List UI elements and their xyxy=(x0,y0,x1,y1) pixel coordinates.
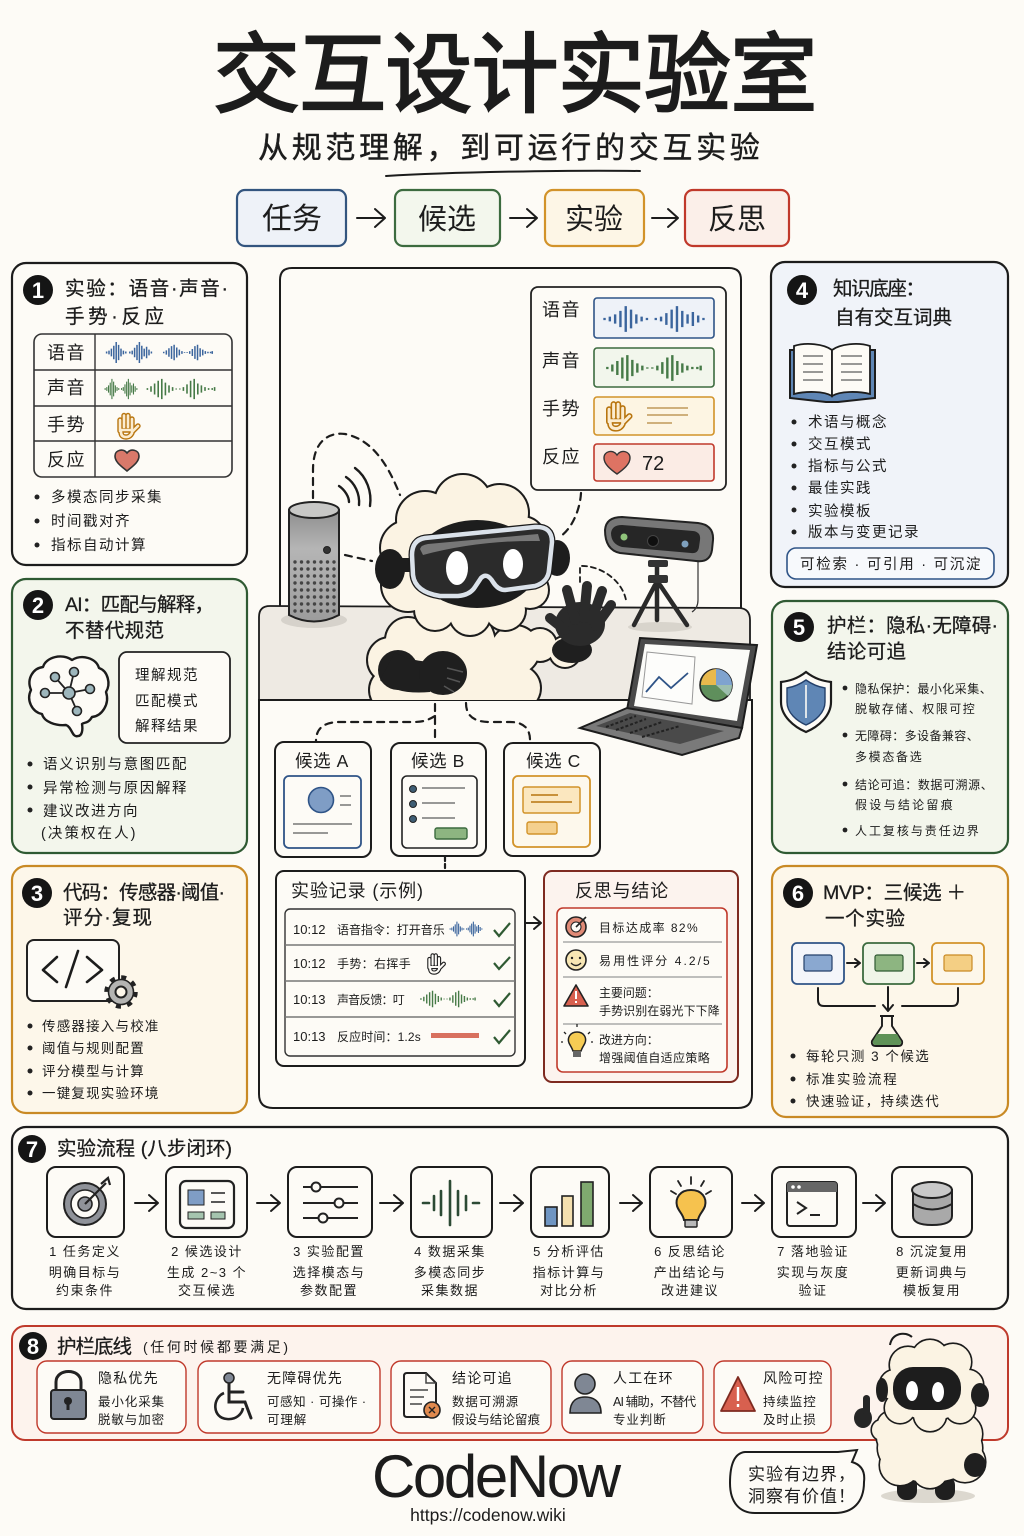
card: privacy xyxy=(37,1361,186,1433)
camera on tripod xyxy=(605,517,713,632)
card: risk control xyxy=(714,1361,831,1433)
heading: AI：匹配与解释， xyxy=(65,594,214,616)
speech bubble xyxy=(730,1450,864,1513)
step 6 xyxy=(650,1167,732,1298)
number badge 1: 1 xyxy=(32,278,44,303)
lower lab section xyxy=(259,700,752,1108)
speech bubble: 实验有边界， xyxy=(748,1465,856,1484)
pill: 候选 xyxy=(395,190,500,246)
number badge 2: 2 xyxy=(32,593,44,618)
candidate C xyxy=(504,743,600,856)
heading xyxy=(65,594,214,642)
waving gloved hand xyxy=(550,586,611,663)
thumbs-up hand xyxy=(854,1395,872,1428)
right hand xyxy=(964,1453,986,1477)
step 6: 改进建议 xyxy=(661,1283,719,1298)
step 1 xyxy=(47,1167,124,1298)
heading xyxy=(57,1336,288,1358)
bullets: 每轮只测 3 个候选 xyxy=(806,1049,930,1064)
card: traceability: 数据可溯源 xyxy=(452,1394,519,1409)
step 2: 交互候选 xyxy=(178,1283,236,1298)
card: privacy: 脱敏与加密 xyxy=(98,1412,165,1427)
bullets: 一键复现实验环境 xyxy=(42,1085,160,1101)
number badge 8 xyxy=(19,1332,47,1360)
card: privacy: 最小化采集 xyxy=(98,1394,165,1409)
bullets: 多模态备选 xyxy=(855,750,922,764)
log row 3: 声音反馈：叮 xyxy=(337,992,405,1007)
bullets: 实验模板 xyxy=(808,502,872,520)
card: risk control: 持续监控 xyxy=(763,1394,817,1409)
step 5: 对比分析 xyxy=(540,1283,598,1298)
camera cable xyxy=(692,562,698,612)
step 4: 多模态同步 xyxy=(414,1265,486,1280)
step 1: 约束条件 xyxy=(56,1283,114,1298)
sheep head xyxy=(381,475,548,635)
heading: 实验：语音·声音· xyxy=(65,278,228,300)
candidate C: 候选 C xyxy=(526,751,581,771)
step 3: 参数配置 xyxy=(300,1283,358,1298)
icon: shield xyxy=(781,672,831,732)
bullets xyxy=(790,1049,940,1109)
heading: 实验流程 (八步闭环) xyxy=(57,1138,232,1160)
sheep body xyxy=(366,616,579,700)
candidate A: 候选 A xyxy=(295,751,349,771)
pill: 候选: 候选 xyxy=(418,203,476,236)
bullets xyxy=(28,755,188,842)
card: risk control: 风险可控 xyxy=(763,1370,824,1386)
panel 1: experiment xyxy=(12,263,247,565)
sheep mascot with headset xyxy=(368,475,611,730)
logo: CodeNow xyxy=(372,1443,622,1510)
panel 6: MVP xyxy=(772,866,1008,1117)
dashed link to readout xyxy=(561,493,581,536)
arrow xyxy=(380,1195,403,1211)
step 7: 7 落地验证 xyxy=(777,1244,849,1259)
ears xyxy=(375,540,570,589)
step 3 xyxy=(288,1167,372,1298)
log row 3 xyxy=(293,991,510,1007)
heading: 评分·复现 xyxy=(63,907,152,929)
bullets: 隐私保护：最小化采集、 xyxy=(855,681,992,696)
card: human in the loop: AI 辅助，不替代 xyxy=(613,1395,697,1409)
bullets: 标准实验流程 xyxy=(806,1072,898,1087)
experiment log: 实验记录 (示例) xyxy=(291,881,423,901)
number badge 6 xyxy=(783,878,813,908)
icon: heart xyxy=(115,450,139,471)
pill: 反思 xyxy=(685,190,789,246)
heading: 结论可追 xyxy=(827,641,906,663)
step 8 xyxy=(892,1167,972,1298)
arrow log to reflection xyxy=(525,917,541,929)
log row 2: 10:12 xyxy=(293,956,326,971)
number badge 5 xyxy=(784,612,814,642)
card: privacy: 隐私优先 xyxy=(98,1370,159,1386)
card: human in the loop xyxy=(562,1361,703,1433)
AI capabilities box: 理解规范 xyxy=(135,667,199,684)
heading: 不替代规范 xyxy=(65,620,164,642)
sensor readout panel: 手势 xyxy=(542,399,581,419)
card: traceability: 结论可追 xyxy=(452,1370,513,1386)
pill: 实验 xyxy=(545,190,644,246)
tag pill: 可检索 · 可引用 · 可沉淀 xyxy=(800,556,982,573)
pill: 任务 xyxy=(237,190,346,246)
icon: bulb xyxy=(561,1024,593,1057)
heading: 自有交互词典 xyxy=(835,307,952,329)
AI capabilities box: 匹配模式 xyxy=(135,693,199,710)
log row 1: 语音指令：打开音乐 xyxy=(337,922,445,937)
card: accessibility: 可感知 · 可操作 · xyxy=(267,1394,367,1409)
eyes xyxy=(906,1381,944,1402)
dashed links xyxy=(313,434,400,498)
pill: 任务: 任务 xyxy=(262,203,322,236)
step 5: 5 分析评估 xyxy=(533,1244,605,1259)
bullets: 交互模式 xyxy=(808,435,872,453)
voice readout xyxy=(594,298,714,338)
modality table: 反应 xyxy=(47,450,86,470)
icon: open book xyxy=(790,344,875,402)
small sheep giving thumbs up xyxy=(854,1334,989,1503)
fist finger creases xyxy=(444,668,463,692)
arrow xyxy=(357,209,385,227)
heading xyxy=(65,278,228,328)
bullets xyxy=(792,413,920,541)
log row 2: 手势：右挥手 xyxy=(337,956,411,971)
reflection and conclusion: 手势识别在弱光下下降 xyxy=(599,1004,720,1018)
step 5: 指标计算与 xyxy=(533,1265,605,1280)
subtitle underline xyxy=(386,171,640,176)
gesture readout xyxy=(594,397,714,435)
modality table: 语音 xyxy=(47,343,86,363)
step 7 xyxy=(772,1167,856,1298)
reflection and conclusion xyxy=(544,871,738,1082)
icon: document xyxy=(404,1373,440,1418)
log row 4: 反应时间：1.2s xyxy=(337,1029,421,1044)
bullets: 快速验证，持续迭代 xyxy=(806,1094,940,1109)
panel 7: experiment flow xyxy=(12,1127,1008,1309)
card: traceability: 假设与结论留痕 xyxy=(452,1412,541,1427)
heading: 手势·反应 xyxy=(65,306,164,328)
step 4 xyxy=(411,1167,492,1298)
bullets: 评分模型与计算 xyxy=(42,1064,145,1079)
modality table xyxy=(34,334,232,477)
panel 4: knowledge base xyxy=(771,262,1008,587)
laptop with charts xyxy=(580,638,757,755)
reaction readout xyxy=(594,444,714,481)
step 4: 4 数据采集 xyxy=(414,1244,486,1259)
number badge 7 xyxy=(18,1135,46,1163)
arrow xyxy=(257,1195,280,1211)
icon: warning xyxy=(564,985,588,1006)
bullets: (决策权在人) xyxy=(41,825,137,842)
panel 2: AI xyxy=(12,579,247,853)
step 2 xyxy=(166,1167,247,1298)
eyes xyxy=(446,549,523,585)
headset goggles xyxy=(412,527,552,596)
dashed link camera to hand xyxy=(580,566,626,600)
reflection and conclusion: 主要问题： xyxy=(599,986,659,1000)
arrow xyxy=(652,209,678,227)
step 1: 1 任务定义 xyxy=(49,1244,121,1259)
bullets xyxy=(34,489,163,554)
sensor readout panel xyxy=(531,287,726,490)
dashed link speaker to sheep xyxy=(345,555,372,561)
heading xyxy=(823,882,966,930)
bullets: 传感器接入与校准 xyxy=(42,1018,160,1034)
bullets xyxy=(843,681,993,838)
heading: 护栏底线 xyxy=(57,1336,132,1358)
bullets xyxy=(28,1018,160,1101)
bullets: 异常检测与原因解释 xyxy=(43,780,188,797)
log row 3: 10:13 xyxy=(293,992,326,1007)
room backdrop xyxy=(280,268,741,610)
step 1: 明确目标与 xyxy=(49,1265,121,1280)
arrow xyxy=(510,209,537,227)
step 7: 实现与灰度 xyxy=(777,1265,849,1280)
dashed branch to candidates xyxy=(316,703,530,742)
bullets: 指标自动计算 xyxy=(51,537,147,554)
sensor readout panel: 语音 xyxy=(542,300,581,320)
heading: 代码：传感器·阈值· xyxy=(63,882,225,904)
url: https://codenow.wiki xyxy=(410,1505,566,1525)
bullets: 版本与变更记录 xyxy=(808,524,920,541)
arrow xyxy=(135,1195,158,1211)
heading: MVP：三候选 ＋ xyxy=(823,882,966,904)
step 4: 采集数据 xyxy=(421,1283,479,1298)
number badge 6: 6 xyxy=(792,881,804,906)
bullets: 多模态同步采集 xyxy=(51,489,163,506)
reflection and conclusion: 增强阈值自适应策略 xyxy=(599,1050,710,1065)
icon: hand xyxy=(120,416,138,437)
reflection and conclusion: 反思与结论 xyxy=(575,881,669,901)
step 8: 8 沉淀复用 xyxy=(896,1244,968,1259)
heading: 知识底座： xyxy=(833,278,925,300)
reaction readout: 72 xyxy=(642,453,664,475)
bullets: 假设与结论留痕 xyxy=(855,797,953,812)
icon: warning triangle xyxy=(721,1377,755,1411)
AI capabilities box: 解释结果 xyxy=(135,718,199,735)
pill: 反思: 反思 xyxy=(708,203,766,236)
heading: 一个实验 xyxy=(825,908,905,930)
reflection and conclusion: 易用性评分 4.2/5 xyxy=(599,954,710,968)
bullets: 结论可追：数据可溯源、 xyxy=(855,777,993,792)
bullets: 语义识别与意图匹配 xyxy=(43,755,188,773)
pill: 实验: 实验 xyxy=(565,203,623,236)
heading: (任何时候都要满足) xyxy=(143,1339,288,1355)
card: accessibility xyxy=(198,1361,380,1433)
arrow xyxy=(742,1195,764,1211)
wool body xyxy=(872,1412,985,1488)
card: traceability xyxy=(391,1361,551,1433)
smart speaker xyxy=(281,502,347,628)
step 7: 验证 xyxy=(798,1283,828,1298)
number badge 4: 4 xyxy=(796,278,809,303)
step 3: 3 实验配置 xyxy=(293,1244,365,1259)
bullets: 指标与公式 xyxy=(808,458,888,475)
right ear xyxy=(971,1383,989,1407)
arrow xyxy=(863,1195,885,1211)
wool head xyxy=(880,1340,983,1431)
log row 4: 10:13 xyxy=(293,1029,326,1044)
icon: code window and gear xyxy=(27,940,136,1006)
number badge 2 xyxy=(23,590,53,620)
flow diagram xyxy=(792,943,984,1046)
modality table: 手势 xyxy=(47,415,86,435)
reflection and conclusion: 目标达成率 82% xyxy=(599,920,698,935)
number badge 7: 7 xyxy=(26,1137,38,1162)
card: human in the loop: 专业判断 xyxy=(613,1412,667,1427)
sensor readout panel: 声音 xyxy=(542,351,581,371)
icon: wheelchair xyxy=(215,1373,251,1419)
dashed link to record xyxy=(444,857,446,871)
ground shadow xyxy=(881,1489,975,1503)
heading xyxy=(63,882,225,929)
bullets: 脱敏存储、权限可控 xyxy=(855,701,975,716)
arrow xyxy=(620,1195,642,1211)
reflection and conclusion: 改进方向： xyxy=(599,1032,659,1047)
curl xyxy=(890,1334,912,1345)
icon: brain network xyxy=(29,656,108,736)
experiment log xyxy=(276,871,525,1066)
bullets: 建议改进方向 xyxy=(43,803,139,820)
card: human in the loop: 人工在环 xyxy=(613,1370,674,1386)
card: accessibility: 可理解 xyxy=(267,1413,307,1427)
step 8: 更新词典与 xyxy=(896,1265,968,1280)
card: risk control: 及时止损 xyxy=(763,1413,817,1427)
sensor readout panel: 反应 xyxy=(542,447,581,467)
icon: person xyxy=(570,1374,601,1413)
step 6: 产出结论与 xyxy=(654,1265,726,1280)
step 2: 2 候选设计 xyxy=(171,1244,243,1259)
face xyxy=(893,1367,961,1410)
arrow xyxy=(500,1195,523,1211)
panel 8: guardrail baseline xyxy=(12,1326,1008,1440)
number badge 1 xyxy=(23,275,53,305)
tag pill xyxy=(787,548,994,579)
crossed arm xyxy=(378,650,467,695)
number badge 3 xyxy=(22,878,52,908)
number badge 3: 3 xyxy=(31,881,43,906)
central lab scene xyxy=(259,268,757,1108)
heading xyxy=(833,278,952,329)
panel 3: code xyxy=(12,866,247,1113)
left ear xyxy=(876,1378,888,1402)
step 8: 模板复用 xyxy=(903,1283,961,1298)
icon: lock xyxy=(51,1372,86,1419)
subtitle: 从规范理解，到可运行的交互实验 xyxy=(258,132,764,165)
log row 4 xyxy=(293,1029,510,1044)
title: 交互设计实验室 xyxy=(213,27,816,124)
bullets: 无障碍：多设备兼容、 xyxy=(855,728,979,743)
log row 1: 10:12 xyxy=(293,922,326,937)
face xyxy=(415,520,539,608)
bullets: 术语与概念 xyxy=(808,413,888,431)
sound readout xyxy=(594,348,714,387)
number badge 4 xyxy=(787,275,817,305)
modality table: 声音 xyxy=(47,378,86,398)
candidate B: 候选 B xyxy=(411,751,465,771)
heading: 护栏：隐私·无障碍· xyxy=(827,615,998,637)
step 6: 6 反思结论 xyxy=(654,1244,726,1259)
log row 2 xyxy=(293,955,510,973)
icon: smile xyxy=(566,950,586,970)
sound waves xyxy=(339,468,370,506)
panel 5: guardrails xyxy=(772,601,1008,853)
log row 1 xyxy=(293,922,510,937)
bullets: 阈值与规则配置 xyxy=(42,1041,145,1056)
lab table top xyxy=(259,606,750,700)
step 2: 生成 2~3 个 xyxy=(167,1265,247,1280)
bullets: 人工复核与责任边界 xyxy=(855,824,979,838)
candidate B xyxy=(391,743,486,856)
heading xyxy=(827,615,998,663)
process strip: task candidate experiment reflect xyxy=(237,190,789,246)
card: accessibility: 无障碍优先 xyxy=(267,1370,343,1386)
AI capabilities box xyxy=(119,652,230,743)
icon: target xyxy=(566,917,586,937)
number badge 5: 5 xyxy=(793,615,805,640)
number badge 8: 8 xyxy=(27,1334,39,1359)
legs xyxy=(897,1476,955,1500)
bullets: 时间戳对齐 xyxy=(51,513,131,530)
step 3: 选择模态与 xyxy=(293,1265,365,1280)
step 5 xyxy=(531,1167,609,1298)
candidate A xyxy=(275,742,371,857)
bullets: 最佳实践 xyxy=(808,480,872,497)
speech bubble: 洞察有价值！ xyxy=(748,1487,856,1506)
icon: flask xyxy=(872,1016,902,1046)
